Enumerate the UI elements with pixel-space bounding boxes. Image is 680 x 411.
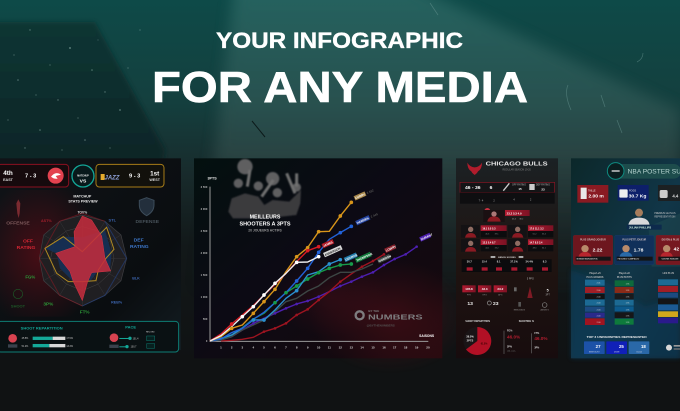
icon: defense: [136, 198, 160, 225]
x axis labels: 15: [371, 345, 375, 349]
radar labels: RATING: [130, 244, 149, 250]
team stats: PPG: [467, 294, 472, 296]
team stats: ASSISTS: [540, 309, 550, 312]
brand logo: NUMBERS: [368, 313, 423, 322]
shooting percentages: 3P%: [507, 346, 513, 348]
shooting percentages: FG%: [507, 330, 513, 332]
team table left: 2.00: [597, 290, 601, 292]
bench scores: 8.1: [497, 259, 501, 263]
stat cards: TAILLE: [588, 189, 596, 192]
poster heading: [607, 163, 680, 179]
shot repartition and pace box: 51.2%: [22, 346, 28, 348]
team badge: west: 9 - 3: [129, 174, 140, 180]
bench scores: BENCH SCORES: [498, 257, 516, 259]
starters grid: [461, 225, 553, 252]
team record bar: 7 - 4: [479, 200, 484, 202]
versus badge: MATCHUP: [77, 175, 89, 178]
panel: nba poster summary: [571, 158, 680, 358]
university cards: 27: [596, 344, 601, 349]
radar heading: MATCHUP: [73, 195, 92, 199]
brand logo: BY THE: [368, 309, 379, 313]
team stats: REBOUNDS: [514, 310, 526, 312]
radar labels: BLK: [132, 277, 140, 281]
radar labels: AST%: [41, 219, 52, 223]
bench scores: 30.7: [467, 259, 472, 263]
player photo group: [228, 159, 301, 218]
series labels: GEORGE: [344, 253, 358, 262]
y axis: 2 500: [201, 229, 208, 233]
x axis labels: 13: [350, 345, 353, 349]
shooting percentages: 46.0%: [507, 335, 521, 340]
shot repartition and pace box: 45.5%: [22, 338, 28, 340]
radar labels: DEF: [134, 237, 144, 243]
radar labels: FG%: [25, 274, 35, 279]
stat cards: [577, 185, 680, 203]
y axis: 3PTS: [208, 176, 217, 180]
team record bar: 2: [530, 200, 532, 202]
x axis labels: 1: [220, 345, 222, 349]
radar chart: [39, 213, 127, 306]
bulls heading: CHICAGO BULLS: [486, 162, 548, 168]
starters grid: 19.1 5.5 5.3: [482, 227, 496, 230]
player cards: 42: [674, 247, 679, 253]
starters grid: 34.1: [542, 248, 546, 250]
team record bar: 46 - 36: [465, 185, 481, 191]
stat cards: 2.00 m: [588, 193, 604, 199]
icon: offense: [6, 199, 30, 227]
team table middle: [615, 280, 634, 325]
shot repartition and pace box: 101.4: [133, 338, 139, 340]
shot repartition pie: [463, 320, 491, 355]
shot repartition pie: 38.5%: [466, 335, 474, 339]
radar labels: 3P%: [43, 301, 54, 306]
shot repartition and pace box: SHOOT REPARTITION: [21, 325, 63, 330]
shot repartition and pace box: [0, 321, 179, 352]
team table left: 1.91: [626, 283, 630, 285]
shot repartition and pace box: PACE: [125, 325, 136, 330]
series lines: [210, 202, 417, 341]
team stats: 5: [547, 288, 549, 292]
versus badge: VS: [80, 179, 87, 185]
team badge: west: JAZZ: [105, 175, 120, 181]
bench scores: 15.4: [482, 259, 487, 263]
player cards: 2.22: [593, 248, 603, 254]
team stats: 3PT: [546, 295, 550, 297]
player cards: UDONIS HASLEM: [662, 258, 679, 261]
team stats: 5 PPG: [527, 278, 534, 280]
radar labels: FT%: [80, 309, 90, 314]
chart heading: 20 JOUEURS ACTIFS: [248, 229, 283, 233]
team badge: east: 7 - 3: [25, 174, 36, 180]
team badge: west: 1st: [150, 171, 160, 178]
starters grid: 44.1: [485, 248, 489, 250]
versus badge: [72, 165, 94, 187]
team stats: 23.2: [497, 287, 504, 291]
starters grid: 39.1: [495, 234, 499, 236]
title: [152, 28, 528, 112]
x axis labels: 4: [252, 345, 254, 349]
team table left: 1.91: [626, 290, 630, 292]
team table left: 2.00: [597, 322, 601, 324]
team table left: PLUS PETITS: [617, 277, 632, 279]
bench scores: 8.3: [543, 259, 547, 263]
stat cards: 30.7 Kg: [629, 193, 646, 199]
x axis labels: 18: [404, 345, 408, 349]
bench scores: [462, 256, 552, 272]
poster heading: NBA POSTER SU: [628, 169, 680, 176]
team badge: west: WEST: [149, 178, 161, 182]
y axis: [201, 176, 428, 343]
player cards: PLUS GRAND JOUEUR: [580, 239, 606, 242]
panel: chicago bulls: [456, 158, 558, 358]
shot repartition and pace box: RECORD: [146, 331, 155, 333]
team badge: east: 4th: [3, 170, 13, 177]
radar labels: [17, 211, 149, 314]
team table left: 2.00: [597, 303, 601, 305]
team table left: [585, 272, 634, 325]
series labels: 2 445: [370, 212, 379, 219]
team table left: 1.91: [626, 303, 630, 305]
team record bar: 2: [493, 200, 495, 202]
brand logo: [356, 309, 423, 328]
bulls heading: [467, 162, 548, 175]
team table left: 2.00: [597, 297, 601, 299]
featured player: PREMIUM LE PLUS: [654, 213, 676, 215]
shooting percentages: 46.0%: [534, 336, 548, 341]
team table left: 1.91: [626, 322, 630, 324]
player cards: 1.78: [634, 247, 644, 253]
shot repartition pie: 2PTS: [467, 339, 474, 343]
radar labels: TOV%: [77, 211, 87, 215]
team badge: west: [96, 164, 164, 187]
university cards: [584, 341, 649, 354]
player cards: FACUNDO CAMPAZZO: [618, 258, 640, 261]
x axis labels: 5: [263, 345, 265, 349]
shot repartition pie: SHOOT REPARTITION: [465, 320, 490, 323]
top universities heading: TOP 3 UNIVERSITIES REPRESENTED: [587, 335, 648, 339]
featured player: 23.2 5.3 4.9: [507, 211, 522, 215]
series labels: THOMPSON: [356, 252, 373, 263]
university cards: KENTUCKY: [589, 352, 600, 354]
heading line 1: YOUR INFOGRAPHIC: [216, 28, 463, 53]
chart heading: MEILLEURS: [250, 214, 281, 220]
y axis: 2 000: [201, 251, 208, 255]
y axis: 3 000: [201, 207, 208, 211]
icon: shoot: [11, 289, 26, 308]
team badge: east: EAST: [3, 178, 14, 182]
brand mark: [666, 345, 680, 351]
shooting percentages: 35.1%: [507, 349, 516, 353]
shot repartition and pace box: 17.5%: [66, 338, 73, 340]
chart heading: SHOOTERS A 3PTS: [239, 221, 291, 227]
university cards: DUKE: [614, 352, 620, 354]
starters grid: 45.3: [485, 234, 490, 236]
series markers: [230, 200, 418, 333]
shot repartition and pace box: 100.7: [131, 347, 137, 349]
featured player: [483, 208, 530, 222]
featured player: REPRESENTATION: [654, 216, 676, 219]
x axis labels: 19: [415, 345, 419, 349]
series labels: ANDERSON: [324, 246, 341, 257]
icon: offense: OFFENSE: [6, 221, 30, 227]
team table left: 2.01: [597, 283, 601, 285]
x axis labels: SAISONS: [419, 334, 435, 338]
player cards: [573, 235, 680, 265]
series labels: GORDON: [378, 254, 392, 263]
team table left: PlayerLeft: [619, 272, 630, 275]
icon: defense: DEFENSE: [136, 219, 160, 225]
x axis labels: 14: [360, 345, 364, 349]
bench scores: 37.1%: [510, 259, 518, 263]
x axis labels: 3: [241, 345, 243, 349]
team table left: 2.00: [597, 309, 601, 311]
x axis labels: 20: [426, 345, 430, 349]
chart heading: [239, 214, 291, 233]
starters grid: 50.2: [533, 234, 537, 236]
team record bar: 4: [513, 200, 515, 202]
x axis labels: 9: [307, 345, 309, 349]
team stats: APG: [498, 293, 503, 296]
y axis: 3 500: [201, 185, 208, 189]
team table left: 1.91: [626, 309, 630, 311]
starters grid: 17.0 11.1 3.2: [529, 227, 544, 230]
x axis labels: 17: [393, 345, 397, 349]
team stats: 23: [493, 301, 499, 307]
team stats: RPG: [483, 294, 487, 296]
series labels: HARDEN: [356, 216, 369, 225]
shooting percentages: SHOOTING %: [519, 321, 535, 323]
starters grid: 48.0: [533, 248, 537, 250]
team stats: 105.8: [465, 287, 473, 291]
team table left: PlayerLeft: [589, 272, 601, 275]
x axis labels: 7: [285, 345, 287, 349]
series labels: JAMES: [322, 240, 333, 248]
player cards: BOBAN MARJANOVIC: [577, 258, 598, 261]
bulls heading: REGULAR SEASON 19-20: [503, 169, 531, 172]
series labels: 2 832: [366, 188, 375, 195]
university cards: UCLA: [636, 351, 642, 354]
y axis: 0: [206, 339, 208, 343]
starters grid: 33.2: [495, 248, 499, 250]
shot repartition pie: 61.5%: [481, 344, 488, 346]
team record bar: [460, 182, 555, 204]
team record bar: DEF RATING: [536, 183, 550, 186]
team table left: 2.00: [597, 315, 601, 317]
featured player: 43.4: [512, 218, 517, 220]
team table right: LES PLUS: [663, 273, 674, 275]
team table left: 1.91: [626, 315, 630, 317]
radar labels: RATING: [17, 245, 35, 251]
x axis labels: [220, 334, 435, 349]
radar labels: REB%: [111, 301, 123, 305]
team table left: PLUS GRANDS: [587, 276, 604, 279]
team record bar: 15: [518, 187, 522, 191]
starters grid: 12.3 5.4 8.7: [482, 241, 496, 244]
y axis: 500: [203, 317, 208, 321]
x axis labels: 16: [382, 345, 386, 349]
series labels: LOWRY: [385, 245, 397, 253]
starters grid: 36.4: [542, 234, 547, 236]
team stats: 13: [467, 301, 473, 307]
panel: 3pt line chart: [194, 158, 470, 373]
team stats: [462, 278, 550, 312]
team record bar: 23: [541, 187, 545, 191]
shooting percentages: [504, 321, 548, 354]
university cards: 18: [641, 344, 646, 349]
x axis labels: 11: [328, 345, 331, 349]
starters grid: 14.7 8.5 3.4: [529, 241, 543, 244]
brand logo: @BYTHENUMBERS: [367, 324, 395, 328]
bench scores: 34.4%: [526, 259, 534, 263]
team record bar: 6: [490, 185, 493, 191]
icon: shoot: SHOOT: [11, 303, 26, 308]
team table left: 1.91: [626, 297, 630, 299]
y axis: 1 000: [201, 295, 208, 299]
radar labels: OFF: [23, 238, 33, 244]
featured player: JULIAN PHILLIPS: [629, 225, 651, 229]
radar labels: STL: [109, 217, 117, 222]
shot repartition and pace box: 13.3%: [66, 346, 73, 348]
team table right: [658, 273, 678, 323]
series labels: DURANT: [420, 233, 433, 241]
radar heading: STATS PREVIEW: [68, 200, 98, 204]
x axis labels: 2: [231, 345, 233, 349]
series labels: CURRY: [354, 192, 366, 200]
heading line 2: FOR ANY MEDIA: [152, 63, 528, 112]
shooting percentages: 3P%: [534, 348, 540, 350]
radar heading: [68, 195, 98, 204]
player cards: PLUS PETIT JOUEUR: [622, 240, 647, 242]
team badge: east: [0, 164, 69, 187]
x axis labels: 10: [317, 345, 321, 349]
team stats: 43.3: [482, 287, 488, 291]
featured player: 38.2: [519, 218, 523, 220]
shooting percentages: FT%: [534, 333, 540, 335]
stat cards: 4.4: [672, 194, 679, 199]
x axis labels: 12: [339, 345, 342, 349]
x axis labels: 8: [296, 345, 298, 349]
panel: matchup radar: [0, 158, 181, 352]
x axis labels: 6: [274, 345, 276, 349]
stat cards: POIDS: [629, 190, 637, 192]
y axis: 1 500: [201, 273, 208, 277]
player cards: DOYEN & PLUS: [662, 240, 679, 242]
series labels: [321, 188, 433, 263]
team record bar: OFF RATING: [512, 183, 526, 186]
featured player: [627, 209, 676, 230]
university cards: 25: [619, 344, 624, 349]
